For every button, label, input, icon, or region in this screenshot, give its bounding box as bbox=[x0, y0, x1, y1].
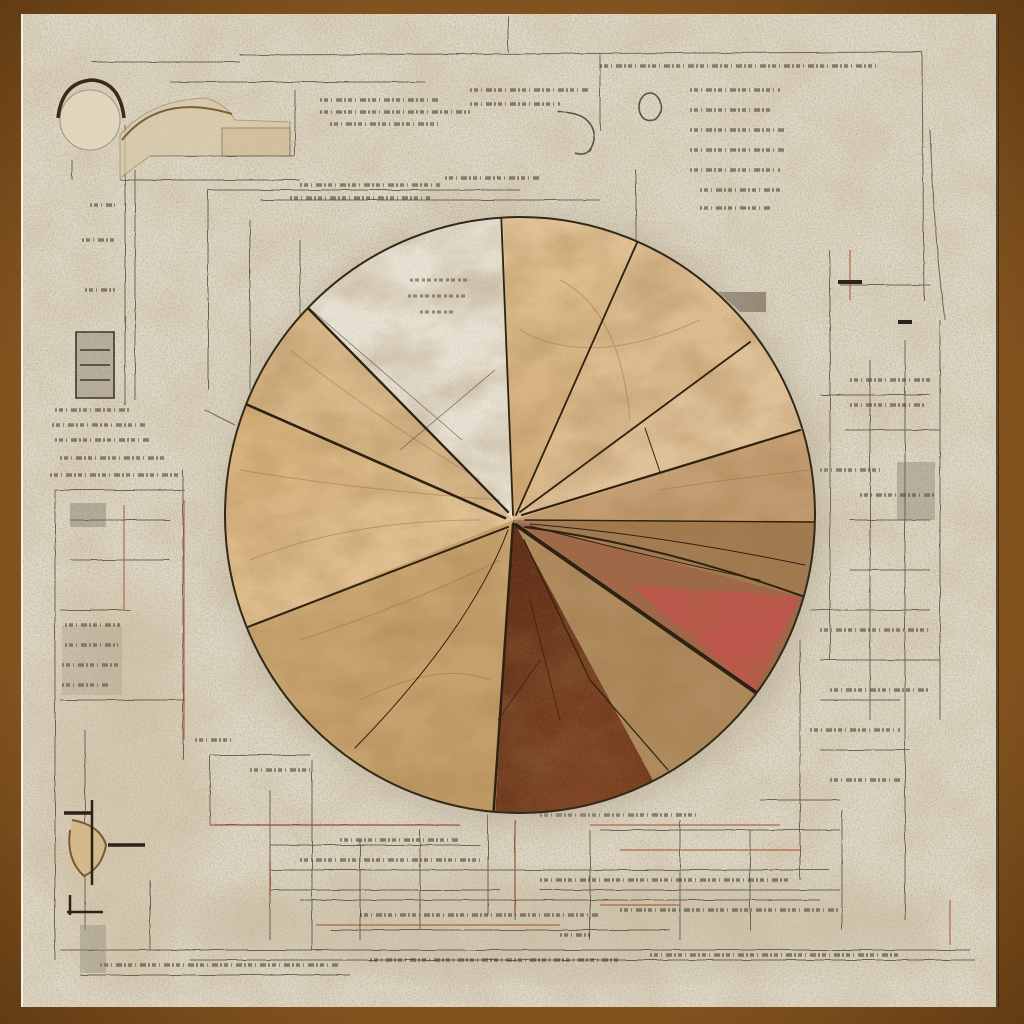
faint red construction lines bbox=[124, 250, 950, 945]
pie outline bbox=[225, 217, 815, 813]
slice: upper right tan bbox=[503, 218, 636, 520]
slice: left tan bbox=[226, 406, 512, 626]
slice: right tan bbox=[514, 340, 802, 520]
notes on white slice bbox=[408, 280, 470, 312]
slice divider lines bbox=[232, 210, 815, 820]
slice: mid brown bbox=[514, 430, 814, 522]
pie chart bbox=[224, 216, 816, 814]
scribbled notes bbox=[50, 66, 935, 965]
paper creases bbox=[240, 280, 810, 700]
slice: large light tan bbox=[513, 242, 756, 520]
slice: lower tan bbox=[248, 520, 513, 811]
slice: dark brown bbox=[495, 520, 653, 812]
slice: blank white bbox=[310, 218, 513, 520]
icon: dark figure sketch bottom left bbox=[64, 800, 145, 973]
icon: tower sketches bbox=[62, 282, 935, 695]
slice: brown strata bbox=[514, 520, 814, 597]
slice: red bbox=[514, 520, 802, 691]
icon: arch sketch top left bbox=[58, 80, 290, 178]
pie shadow bbox=[226, 220, 822, 820]
slice: speckled brown bbox=[513, 520, 754, 780]
slice: upper left tan bbox=[248, 310, 513, 520]
